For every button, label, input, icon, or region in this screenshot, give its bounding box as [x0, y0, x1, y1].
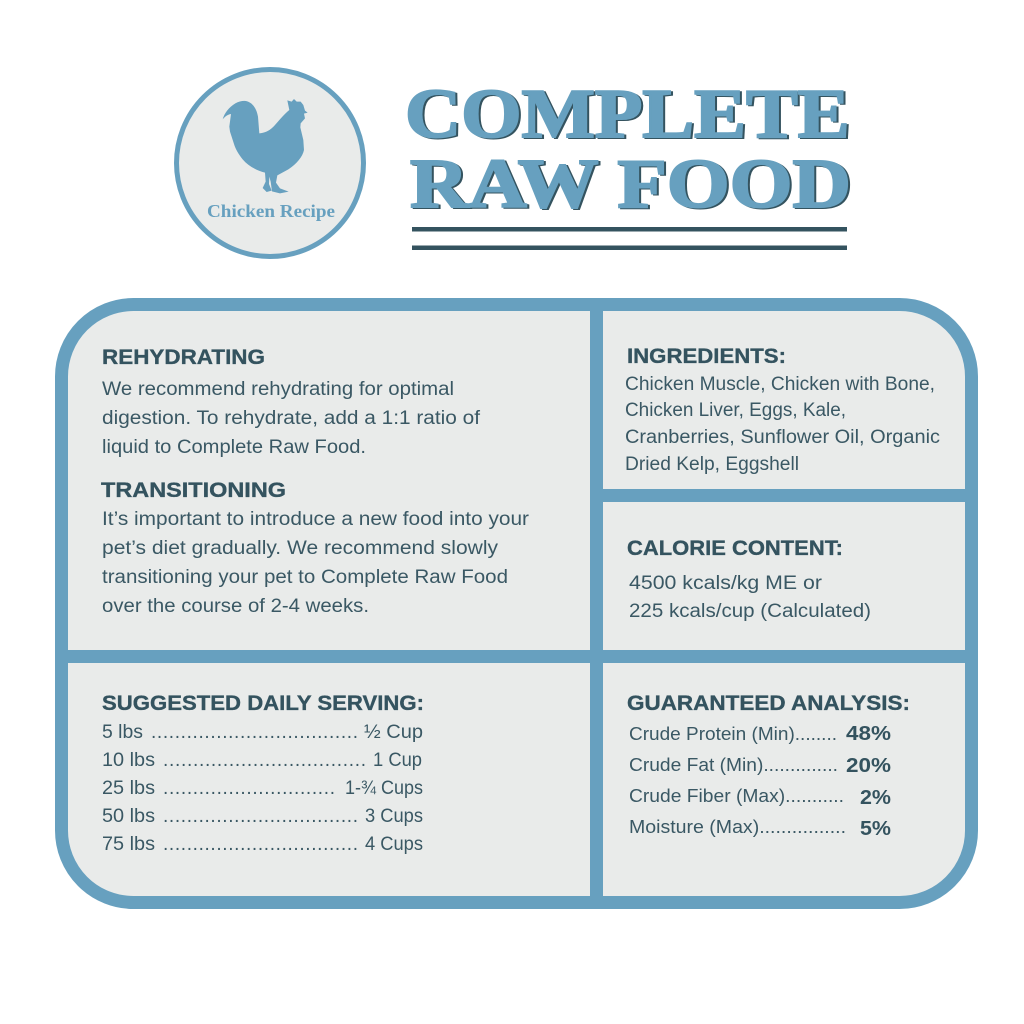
panel frame [62, 304, 972, 904]
text: transitioning [102, 509, 530, 617]
serving row: 50 lbs: 3 Cups [365, 806, 423, 827]
serving row: 10 lbs: .................................. [163, 750, 366, 771]
text: transitioning: It’s important to introduce a new food into your [102, 509, 530, 530]
serving row: 5 lbs: ................................... [151, 722, 358, 743]
serving row: 75 lbs: 4 Cups [365, 834, 423, 855]
analysis row: moisture: Moisture (Max)................ [629, 817, 846, 837]
serving row: 25 lbs: 1-¾ Cups [345, 778, 423, 799]
panel: ingredients [625, 345, 940, 475]
title: COMPLETE [407, 76, 852, 153]
analysis row: crude protein: Crude Protein (Min)........ [629, 724, 837, 744]
analysis row: moisture [629, 817, 891, 840]
analysis row: crude fiber [629, 786, 891, 809]
serving row: 75 lbs: ................................. [163, 834, 358, 855]
icon: chicken silhouette [223, 99, 308, 193]
analysis row: crude protein [629, 723, 891, 745]
serving row: 50 lbs: 50 lbs [102, 806, 155, 827]
heading: rehydrating: REHYDRATING [102, 346, 265, 369]
text: transitioning: over the course of 2-4 weeks. [102, 596, 369, 617]
heading: calorie content: CALORIE CONTENT: [627, 537, 843, 560]
title [405, 75, 853, 224]
panel: suggested daily serving [102, 692, 424, 855]
heading: ingredients: INGREDIENTS: [627, 345, 786, 368]
panel: guaranteed analysis [627, 692, 910, 840]
serving row: 25 lbs: ............................. [163, 778, 335, 799]
text: transitioning: transitioning your pet to Complete Raw Food [102, 567, 508, 588]
analysis row: moisture: 5% [860, 818, 891, 840]
text: rehydrating: We recommend rehydrating for optimal [102, 379, 454, 400]
analysis row: crude fat: Crude Fat (Min).............. [629, 755, 838, 775]
serving row: 10 lbs [102, 750, 422, 771]
panel: calorie content [627, 537, 871, 622]
serving row: 75 lbs [102, 834, 423, 855]
analysis row: crude fat [629, 755, 891, 777]
serving row: 25 lbs: 25 lbs [102, 778, 155, 799]
text: rehydrating [102, 379, 481, 458]
text: rehydrating: digestion. To rehydrate, add a 1:1 ratio of [102, 408, 481, 429]
text: ingredients list: Cranberries, Sunflower Oil, Organic [625, 427, 940, 448]
analysis row: crude protein: 48% [846, 723, 891, 745]
serving row: 50 lbs [102, 806, 423, 827]
heading: guaranteed analysis: GUARANTEED ANALYSIS: [627, 692, 910, 715]
text: ingredients list [625, 374, 940, 475]
text: ingredients list: Dried Kelp, Eggshell [625, 454, 799, 475]
badge label: Chicken Recipe [207, 201, 335, 221]
analysis row: crude fiber: Crude Fiber (Max)........... [629, 786, 844, 806]
analysis row: crude fiber: 2% [860, 787, 891, 809]
text: ingredients list: Chicken Liver, Eggs, Kale, [625, 400, 846, 421]
title: RAW FOOD [410, 146, 851, 223]
title underlines [412, 227, 847, 250]
serving row: 10 lbs: 10 lbs [102, 750, 155, 771]
title: COMPLETE [405, 75, 850, 152]
serving row: 5 lbs: 5 lbs [102, 722, 143, 743]
badge: chicken recipe [176, 70, 364, 256]
text: ingredients list: Chicken Muscle, Chicken with Bone, [625, 374, 935, 395]
analysis row: crude fat: 20% [846, 755, 891, 777]
text: calories: 225 kcals/cup (Calculated) [629, 601, 871, 622]
text: calories: 4500 kcals/kg ME or [629, 573, 823, 594]
text: calories [629, 573, 871, 622]
text: transitioning: pet’s diet gradually. We recommend slowly [102, 538, 499, 559]
serving row: 75 lbs: 75 lbs [102, 834, 155, 855]
serving row: 25 lbs [102, 778, 423, 799]
serving row: 50 lbs: ................................. [163, 806, 358, 827]
title: RAW FOOD [412, 147, 853, 224]
serving row: 10 lbs: 1 Cup [373, 750, 422, 771]
heading: suggested daily serving: SUGGESTED DAILY SERVING: [102, 692, 424, 715]
panel: rehydrating and transitioning [101, 346, 530, 617]
serving row: 5 lbs [102, 722, 423, 743]
text: rehydrating: liquid to Complete Raw Food. [102, 437, 366, 458]
serving row: 5 lbs: ½ Cup [364, 722, 423, 743]
heading: transitioning: TRANSITIONING [101, 479, 286, 502]
